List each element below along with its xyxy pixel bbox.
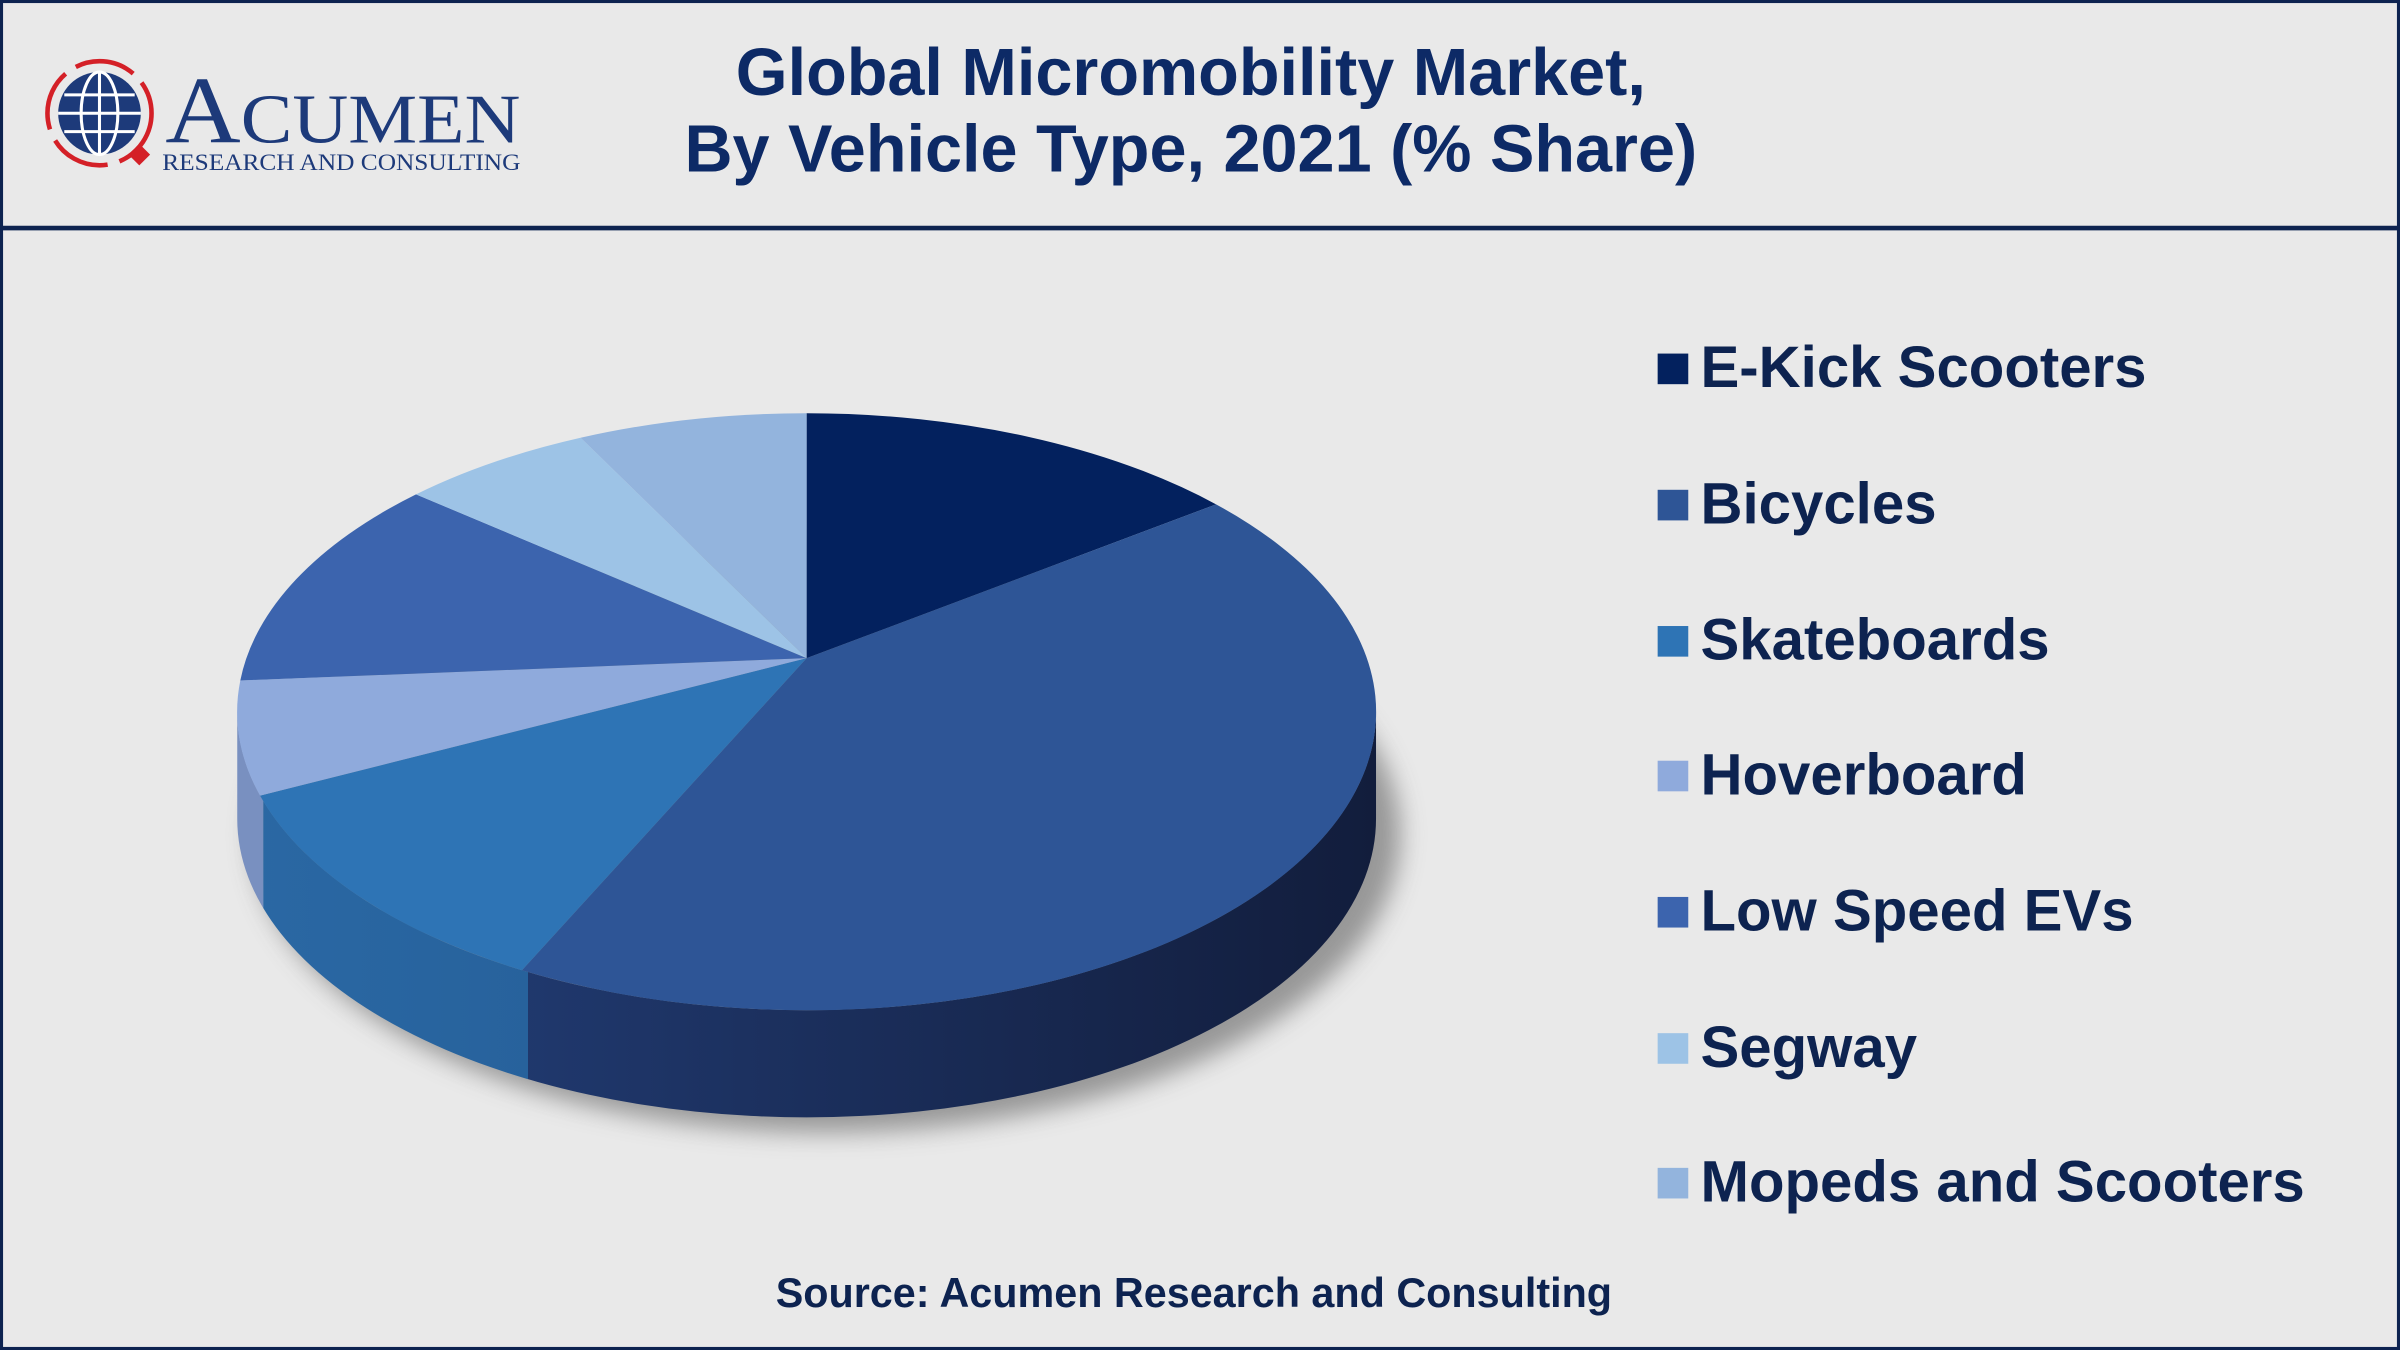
title: Global Micromobility Market, xyxy=(736,36,1646,110)
legend: Skateboards xyxy=(1701,608,2050,673)
title xyxy=(684,36,1697,186)
header divider xyxy=(0,227,2400,230)
legend: E-Kick Scooters xyxy=(1701,335,2147,400)
legend: Bicycles xyxy=(1701,471,1937,536)
logo: RESEARCH AND CONSULTING xyxy=(162,150,520,175)
legend: Low Speed EVs xyxy=(1701,879,2134,944)
legend: Hoverboard xyxy=(1701,742,2027,807)
logo xyxy=(47,57,520,175)
title: By Vehicle Type, 2021 (% Share) xyxy=(684,112,1697,186)
source: Source: Acumen Research and Consulting xyxy=(776,1270,1612,1316)
legend: Mopeds and Scooters xyxy=(1701,1150,2305,1215)
legend xyxy=(1658,335,2305,1215)
pie chart xyxy=(237,413,1401,1133)
legend: Segway xyxy=(1701,1015,1918,1080)
logo: ACUMEN xyxy=(165,57,520,163)
